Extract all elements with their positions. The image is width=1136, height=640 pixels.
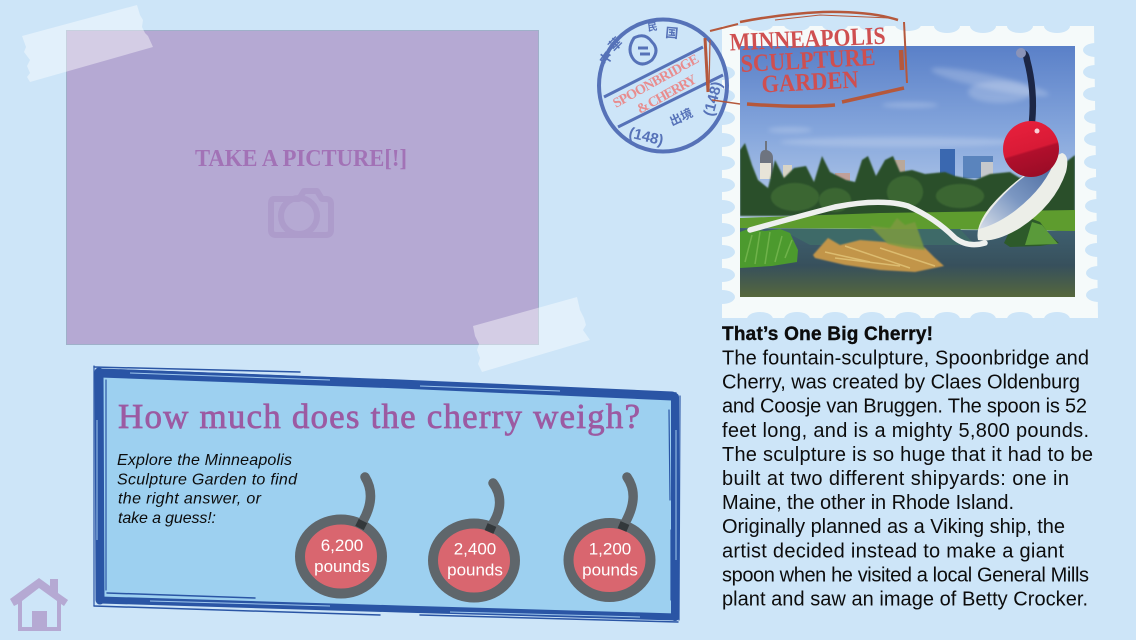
tall grass — [870, 218, 925, 250]
photo placeholder panel — [66, 30, 538, 344]
article body: The fountain-sculpture, Spoonbridge and — [722, 348, 1089, 370]
article body: built at two different shipyards: one in — [722, 468, 1069, 490]
water — [740, 228, 1075, 297]
postmark numbers and marks: 華 — [606, 34, 625, 54]
answer: 2,400 pounds: 2,400 — [454, 540, 496, 558]
brush streaks — [97, 373, 676, 617]
article body: plant and saw an image of Betty Crocker. — [722, 588, 1088, 610]
postmark band text: & CHERRY — [635, 72, 700, 117]
article body: Cherry, was created by Claes Oldenburg — [722, 372, 1080, 394]
spoon handle — [750, 202, 985, 245]
skyline — [940, 149, 955, 177]
article text — [722, 324, 1093, 610]
answer: 1,200 pounds: pounds — [582, 560, 638, 580]
postmark flower emblem — [630, 36, 656, 64]
answer: 6,200 pounds — [300, 477, 382, 594]
answer: 2,400 pounds: pounds — [447, 560, 503, 580]
quiz heading: How much does the cherry weigh? — [118, 397, 640, 436]
postmark numbers and marks: 出境 — [667, 105, 695, 129]
stamp border — [705, 12, 907, 106]
quiz instructions: the right answer, or — [118, 490, 262, 508]
quiz instructions: take a guess!: — [118, 510, 216, 527]
article body: feet long, and is a mighty 5,800 pounds. — [722, 420, 1089, 442]
clouds — [768, 63, 1050, 147]
left reeds — [740, 229, 798, 268]
answer: 6,200 pounds: pounds — [314, 557, 370, 576]
rubber stamp: Minneapolis Sculpture Garden: SCULPTURE — [740, 44, 876, 78]
postmark band text: SPOONBRIDGE — [611, 52, 702, 111]
stamp text: MINNEAPOLIS — [729, 23, 886, 56]
postmark numbers and marks: 国 — [665, 25, 679, 41]
rough brush frame — [94, 366, 680, 622]
lawn — [740, 210, 1075, 232]
article heading: That’s One Big Cherry! — [722, 324, 933, 345]
icon: camera — [271, 191, 331, 235]
answer: 1,200 pounds: 1,200 — [589, 540, 631, 558]
article body: Originally planned as a Viking ship, the — [722, 516, 1065, 538]
article body — [722, 348, 1093, 610]
icon: home — [10, 578, 68, 631]
postmark numbers and marks: 中 — [596, 48, 616, 68]
postmark numbers and marks — [596, 21, 726, 149]
tape bottom right — [473, 297, 590, 372]
article body: artist decided instead to make a giant — [722, 540, 1064, 562]
quiz panel — [94, 366, 680, 622]
cherry stem — [1021, 53, 1033, 122]
quiz instructions: Explore the Minneapolis — [117, 452, 292, 469]
postmark: Spoonbridge & Cherry — [596, 20, 727, 152]
cherry — [1003, 121, 1059, 177]
answer: 2,400 pounds — [433, 483, 515, 598]
take a picture label: TAKE A PICTURE[!] — [195, 146, 407, 172]
stamp perforations — [709, 19, 1112, 326]
postmark numbers and marks: (148) — [700, 80, 726, 118]
right bush — [1004, 218, 1059, 247]
article body: spoon when he visited a local General Mills — [722, 564, 1089, 586]
answer: 6,200 pounds: 6,200 — [321, 536, 363, 555]
tape top left — [22, 5, 153, 82]
photo: Spoonbridge and Cherry — [740, 46, 1075, 297]
spoon bowl — [978, 153, 1067, 240]
article body: and Coosje van Bruggen. The spoon is 52 — [722, 396, 1087, 418]
trees — [740, 143, 1075, 216]
rubber stamp: Minneapolis Sculpture Garden — [705, 12, 907, 106]
quiz instructions — [117, 452, 298, 527]
postmark numbers and marks: 民 — [647, 21, 658, 34]
answer: 1,200 pounds — [568, 477, 650, 597]
quiz instructions: Sculpture Garden to find — [117, 472, 298, 488]
straw island — [813, 238, 944, 272]
postage stamp with photo — [722, 26, 1098, 318]
article body: Maine, the other in Rhode Island. — [722, 492, 1014, 514]
article body: The sculpture is so huge that it had to be — [722, 444, 1093, 466]
postmark numbers and marks: (148) — [627, 124, 665, 149]
rubber stamp: Minneapolis Sculpture Garden: GARDEN — [761, 66, 859, 98]
